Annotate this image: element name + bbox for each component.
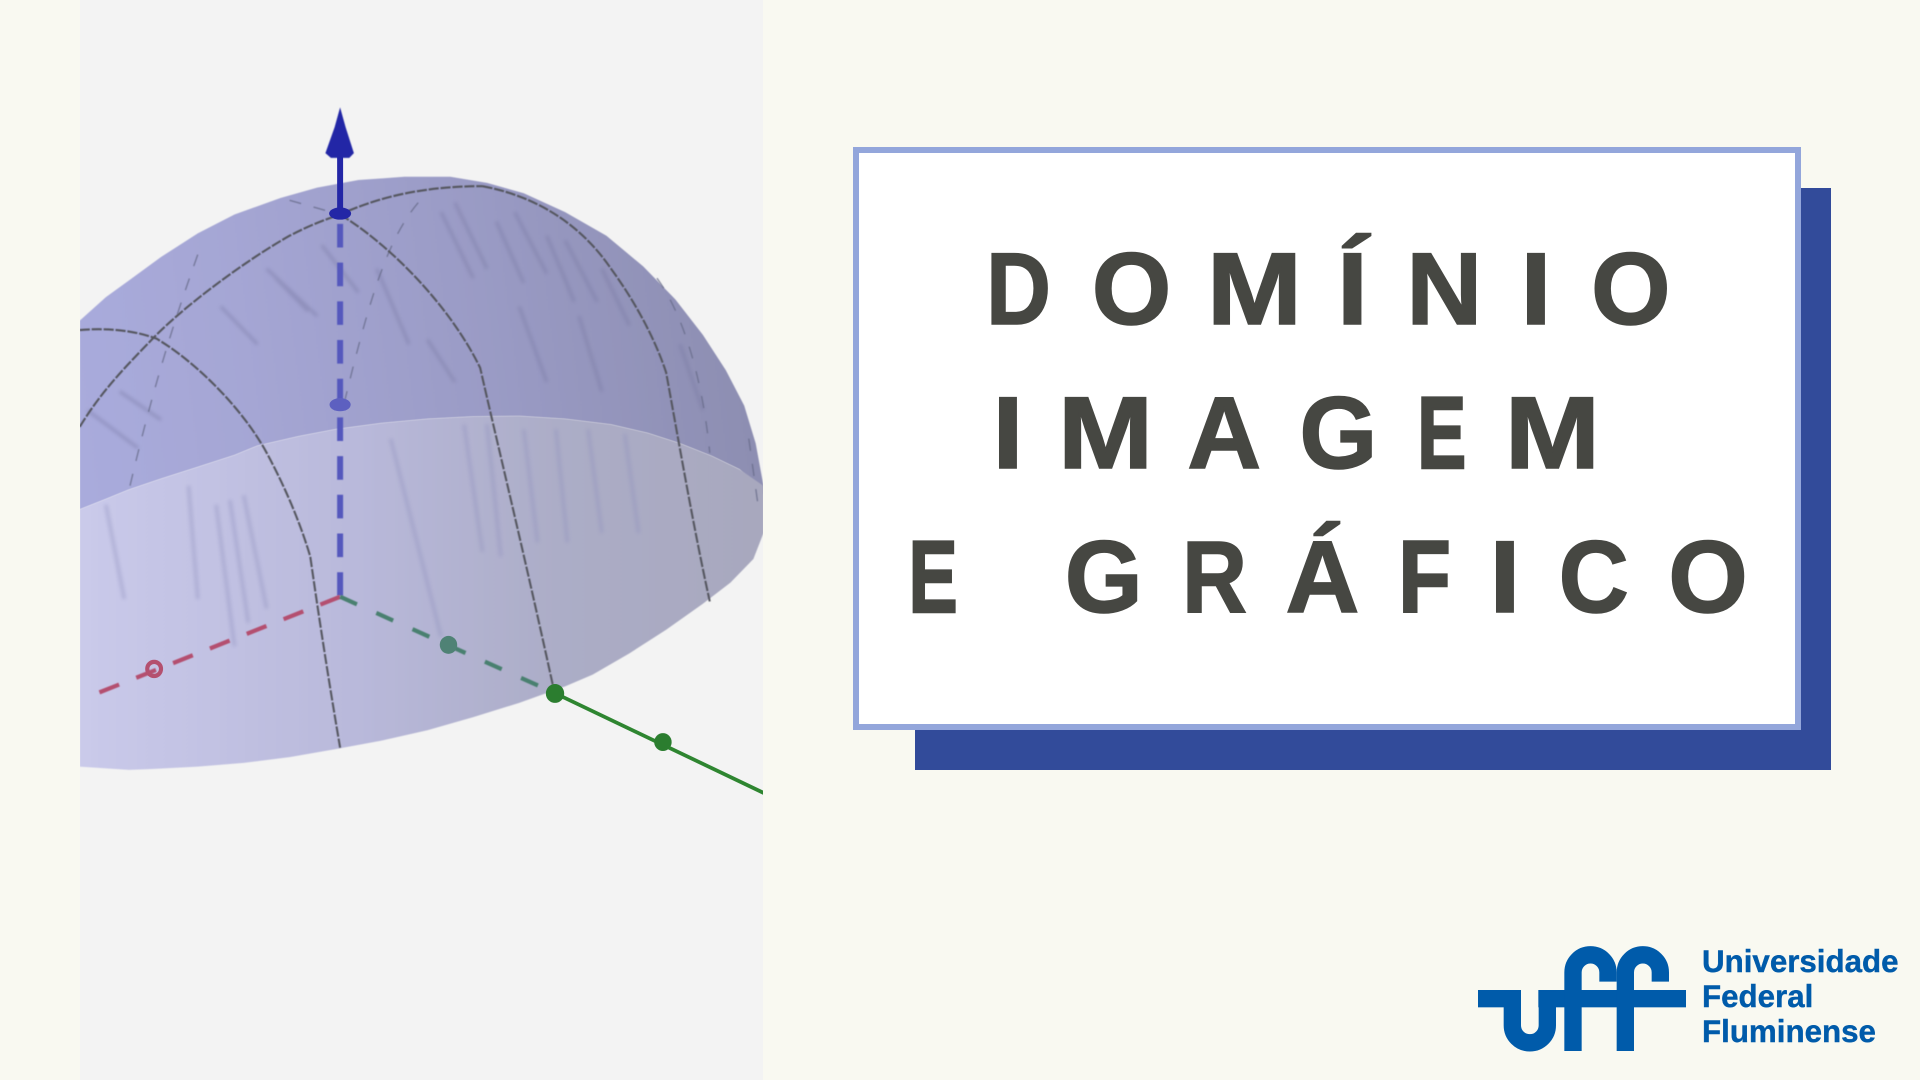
dome surface: upper part <box>80 177 763 509</box>
title line 3: C <box>1559 521 1629 635</box>
axis x: red dashed <box>97 597 340 693</box>
title line 3: E <box>909 520 958 634</box>
title <box>909 231 1748 635</box>
title line 2: M <box>1505 376 1600 490</box>
axis y: green <box>340 597 765 794</box>
surface streaks <box>88 204 628 646</box>
title line 2: E <box>1417 376 1466 490</box>
title line 1: M <box>1207 232 1302 346</box>
logo text: Universidade <box>1702 944 1899 979</box>
title line 2 <box>992 376 1600 490</box>
axis z: blue arrow <box>325 107 354 597</box>
icon: uff symbol <box>1478 955 1686 1051</box>
title line 1: N <box>1406 231 1482 346</box>
faint back grid lines <box>129 200 758 505</box>
logo: Universidade Federal Fluminense <box>1478 944 1899 1051</box>
grid arcs on the surface <box>80 186 710 748</box>
title line 2: M <box>1058 376 1153 490</box>
title line 1: O <box>1591 232 1670 346</box>
title line 3: Á <box>1286 520 1359 634</box>
title line 2: I <box>992 376 1024 490</box>
dome surface: lower part <box>80 416 763 770</box>
title line 3 <box>909 520 1748 635</box>
title line 1: Í <box>1337 232 1371 346</box>
title line 3: G <box>1065 521 1143 634</box>
logo text: Federal <box>1702 979 1813 1014</box>
title line 2: G <box>1300 377 1377 490</box>
title line 1 <box>986 231 1670 346</box>
title line 1: O <box>1092 232 1171 346</box>
title line 3: I <box>1489 520 1520 634</box>
logo text <box>1702 944 1899 1049</box>
logo text: Fluminense <box>1702 1014 1876 1049</box>
title line 3: F <box>1398 520 1451 634</box>
title line 3: R <box>1182 521 1247 634</box>
title line 2: A <box>1187 376 1261 490</box>
shadow block behind title <box>915 188 1831 770</box>
panel: 3D graph image <box>80 106 763 795</box>
title line 1: I <box>1520 232 1552 346</box>
title card <box>856 150 1798 727</box>
title line 1: D <box>986 233 1051 346</box>
title line 3: O <box>1668 520 1748 634</box>
